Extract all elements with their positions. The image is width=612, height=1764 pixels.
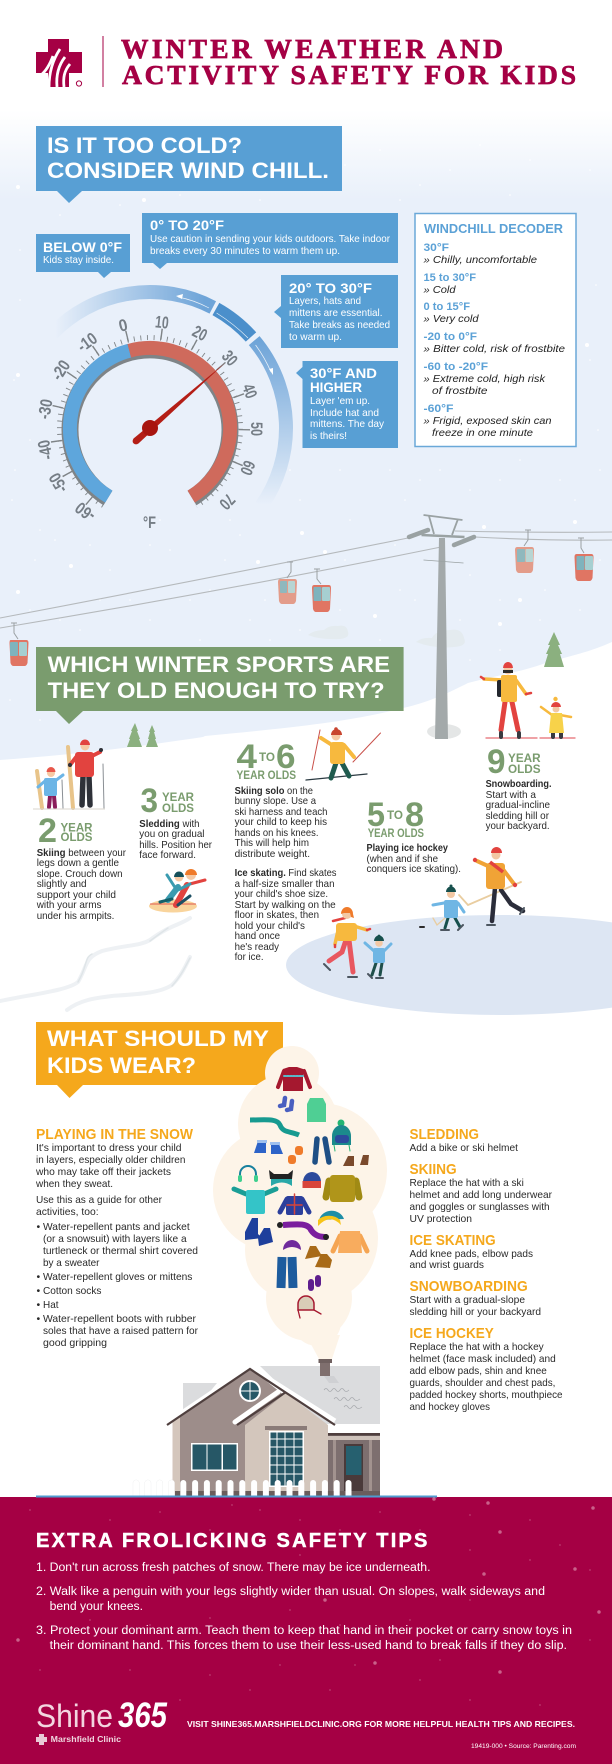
age block: 9 year olds: sledding hill or (486, 810, 549, 822)
gondola 4 (574, 538, 594, 581)
icon: blue socks (280, 1098, 292, 1110)
age block: 4 to 6 year olds: This will help him (235, 837, 309, 849)
age block: 5 to 8 year olds: 8 (405, 796, 424, 834)
text block: activity gear additions: helmet and add long underwear (410, 1189, 552, 1201)
icon: brown boots (343, 1155, 369, 1166)
icon: blue pants (281, 1257, 293, 1288)
text block: numbered tips (36, 1562, 572, 1652)
scale numbers: -50 (45, 469, 72, 496)
callout: 0 to 20F: 0° TO 20°F (150, 217, 224, 233)
age block: 2 year olds: legs down a gentle (37, 857, 119, 869)
age block: 4 to 6 year olds: hand once (235, 930, 280, 942)
roof edges (167, 1367, 335, 1425)
age block: 9 year olds: Start with a (486, 789, 536, 801)
age block: 4 to 6 year olds: a half-size smaller than (235, 878, 335, 890)
title (121, 33, 576, 90)
callout: 20 to 30F: to warm up. (289, 331, 342, 343)
text block: playing in the snow: turtleneck or thermal shirt covered (43, 1245, 198, 1257)
age block: 4 to 6 year olds (235, 738, 336, 963)
text block: activity gear additions: ICE HOCKEY (410, 1325, 494, 1342)
icon: teal earmuffs (238, 1166, 258, 1182)
text block: numbered tips: bend your knees. (50, 1601, 143, 1613)
heading: what should my kids wear (36, 1022, 283, 1098)
text block: playing in the snow: Cotton socks (43, 1285, 102, 1297)
age block: 4 to 6 year olds: Skiing solo on the (235, 785, 313, 797)
scale numbers: -40 (34, 438, 57, 462)
heading: extra safety tips: EXTRA FROLICKING SAFETY TIPS (36, 1530, 427, 1552)
fence (136, 1483, 380, 1497)
icon: red and navy hat (302, 1172, 321, 1188)
clouds behind the lift (308, 626, 465, 647)
text block: playing in the snow: • (36, 1299, 40, 1311)
panel: windchill decoder: » Chilly, uncomfortable (424, 254, 537, 266)
callout: below 0F: BELOW 0°F (43, 239, 122, 255)
callout: 30F and higher: 30°F AND (310, 365, 377, 381)
chart: thermometer gauge (34, 292, 286, 532)
gauge ring (70, 348, 230, 498)
age block: 2 year olds: support your child (37, 889, 116, 901)
ski lift cables (0, 531, 612, 628)
text block: playing in the snow: • (36, 1313, 40, 1325)
panel: windchill decoder: » Cold (424, 284, 457, 296)
clothing icons (234, 1067, 369, 1318)
panel: windchill decoder: 15 to 30°F (424, 272, 476, 284)
panel: windchill decoder: -20 to 0°F (424, 331, 477, 343)
callout: 30F and higher: HIGHER (310, 379, 362, 395)
age block: 4 to 6 year olds: hands on his knees. (235, 827, 318, 839)
text block: numbered tips: their dominant hand. This forces them to use their less-used hand to break falls if they do slip. (50, 1640, 567, 1652)
logo: Shine365: 365 (118, 1696, 167, 1735)
age block: 3 year olds: you on gradual (139, 828, 204, 840)
heading: which winter sports: THEY OLD ENOUGH TO TRY? (48, 678, 385, 703)
text block: playing in the snow: Water-repellent pants and jacket (43, 1221, 190, 1233)
age block: 4 to 6 year olds: he's ready (235, 941, 280, 953)
text: source: 19419-000 • Source: Parenting.com (471, 1743, 576, 1750)
age block: 5 to 8 year olds: conquers ice skating). (366, 863, 461, 875)
tall window (265, 1426, 307, 1487)
icon: red sweater (278, 1067, 310, 1091)
chimney (318, 1359, 339, 1383)
age block: 9 year olds: OLDS (508, 764, 541, 776)
text block: activity gear additions: Add knee pads, elbow pads (410, 1248, 533, 1260)
panel: windchill decoder: freeze in one minute (432, 427, 533, 439)
snow hill (0, 642, 612, 1497)
text block: playing in the snow: Water-repellent gloves or mittens (43, 1271, 192, 1283)
age block: 3 year olds: YEAR (162, 792, 195, 804)
icon: navy pants (315, 1139, 329, 1162)
figure: parent and toddler on skis (33, 740, 105, 809)
ski lift tower (409, 515, 474, 739)
text block: playing in the snow: Hat (43, 1299, 59, 1311)
text block: playing in the snow: • (36, 1285, 40, 1297)
age block: 2 year olds: under his armpits. (37, 910, 114, 922)
callout: 20 to 30F: Layers, hats and (289, 295, 361, 307)
callout: 30F and higher: Layer 'em up. (310, 395, 370, 407)
scale numbers: -10 (74, 329, 101, 356)
panel: windchill decoder: -60 to -20°F (424, 361, 488, 373)
icon: teal jacket (234, 1189, 276, 1214)
text block: playing in the snow: soles that have a raised pattern for (43, 1325, 198, 1337)
title: WINTER WEATHER AND (121, 33, 503, 64)
panel: windchill decoder: 30°F (424, 242, 449, 254)
icon: Marshfield Clinic wheat cross logo (36, 39, 82, 87)
porch (328, 1424, 380, 1496)
panel: windchill decoder: » Bitter cold, risk of frostbite (424, 343, 565, 355)
age block: 5 to 8 year olds: 5 (367, 796, 385, 834)
icon: red trapper hat (298, 1296, 321, 1318)
callout: 0 to 20F: breaks every 30 minutes to warm them up. (150, 245, 340, 257)
text block: playing in the snow: It's important to dress your child (36, 1142, 182, 1154)
panel: windchill decoder: » Very cold (424, 313, 480, 325)
age block: 4 to 6 year olds: floor in skates, then (235, 909, 319, 921)
text block: activity gear additions (410, 1126, 563, 1413)
gondola 1 (278, 562, 297, 604)
panel: windchill decoder: » Frigid, exposed skin can (424, 415, 552, 427)
callout: below 0F: Kids stay inside. (43, 254, 114, 266)
text block: activity gear additions: SKIING (410, 1161, 457, 1178)
age block: 3 year olds (139, 782, 212, 861)
figure: two kids on a snow tube (149, 869, 205, 912)
text block: playing in the snow: by a sweater (43, 1257, 100, 1269)
panel: windchill decoder (415, 214, 576, 446)
age block: 5 to 8 year olds: TO (387, 810, 403, 822)
text block: playing in the snow: when they sweat. (35, 1178, 113, 1190)
age block: 5 to 8 year olds: (when and if she (366, 853, 438, 865)
age block: 5 to 8 year olds (366, 796, 461, 875)
gondola 3 (515, 530, 534, 573)
heading: is it too cold: IS IT TOO COLD? (47, 133, 242, 158)
logo: Shine365 (36, 1696, 167, 1735)
figure: ice skating parent and child (324, 907, 391, 978)
trees (127, 632, 564, 747)
age block: 9 year olds (486, 743, 552, 832)
age block: 2 year olds: with your arms (36, 899, 102, 911)
tick marks (56, 333, 245, 506)
age block: 4 to 6 year olds: bunny slope. Use a (235, 795, 316, 807)
age block: 9 year olds: YEAR (508, 753, 541, 765)
gondola 2 (312, 569, 331, 612)
text block: activity gear additions: UV protection (410, 1213, 472, 1225)
text block: playing in the snow: activities, too: (36, 1206, 99, 1218)
text block: activity gear additions: guards, shoulder and chest pads, (410, 1377, 555, 1389)
scale numbers: 60 (236, 458, 259, 478)
gondola 5 (10, 623, 28, 666)
round window (239, 1380, 261, 1402)
icon: black and teal hat (269, 1170, 293, 1186)
age block: 4 to 6 year olds: hold your child's (235, 920, 305, 932)
scale numbers: 70 (215, 490, 239, 513)
icon: teal scarf (250, 1120, 299, 1135)
age block: 4 to 6 year olds: Ice skating. Find skates (235, 867, 336, 879)
text block: playing in the snow (35, 1126, 198, 1349)
callout: 30F and higher: is theirs! (310, 430, 347, 442)
callout: 30F and higher: Include hat and (310, 407, 379, 419)
walls (172, 1415, 180, 1497)
age block: 2 year olds: OLDS (60, 832, 93, 844)
age block: 9 year olds: 9 (487, 743, 506, 781)
icon: green vest (307, 1098, 326, 1122)
age block: 9 year olds: your backyard. (486, 820, 550, 832)
scale numbers: 0 (117, 315, 130, 336)
icon: purple mittens (311, 1278, 318, 1288)
icon: purple hat (283, 1240, 301, 1250)
text block: playing in the snow: Water-repellent boots with rubber (43, 1313, 196, 1325)
text block: playing in the snow: PLAYING IN THE SNOW (36, 1126, 194, 1143)
scale numbers: 20 (189, 322, 210, 345)
figure: young skier (306, 727, 380, 780)
text block: activity gear additions: add elbow pads, shin and knee (410, 1365, 547, 1377)
scale numbers (34, 312, 266, 532)
text block: numbered tips: 3. Protect your dominant arm. Teach them to keep that hand in their pocket or carry snow toys in (36, 1625, 572, 1637)
figure: snowboarding parent and child (481, 662, 575, 738)
text block: activity gear additions: and goggles or sunglasses with (410, 1201, 550, 1213)
scale numbers: 50 (247, 422, 266, 436)
icon: blue snow boots (254, 1140, 283, 1154)
panel: windchill decoder: of frostbite (432, 385, 488, 397)
text block: activity gear additions: Replace the hat with a ski (410, 1177, 524, 1189)
logo: Shine365: Shine (36, 1698, 113, 1734)
ski trails in the snow (0, 918, 190, 1010)
icon: navy boots (245, 1218, 273, 1246)
age block: 3 year olds: OLDS (162, 803, 194, 815)
text block: playing in the snow: • (36, 1221, 40, 1233)
panel: windchill decoder: WINDCHILL DECODER (424, 221, 564, 236)
age block: 4 to 6 year olds: 4 (236, 738, 257, 776)
age block: 9 year olds: Snowboarding. (486, 778, 552, 790)
text block: playing in the snow: in layers, especially older children (36, 1154, 186, 1166)
age block: 4 to 6 year olds: your child's shoe size. (235, 888, 328, 900)
text block: playing in the snow: • (36, 1271, 40, 1283)
icon: yellow and teal hat (318, 1211, 344, 1226)
icon: orange mittens (288, 1146, 303, 1164)
roof (183, 1366, 380, 1425)
heading: what should my kids wear: WHAT SHOULD MY (47, 1026, 269, 1051)
icon: teal knit hat (332, 1120, 351, 1151)
text block: activity gear additions: SLEDDING (410, 1126, 479, 1143)
text block: activity gear additions: Add a bike or ski helmet (410, 1142, 518, 1154)
text: website call to action: VISIT SHINE365.MARSHFIELDCLINIC.ORG FOR MORE HELPFUL HEALTH TIPS AND RECIPES. (187, 1719, 575, 1729)
scale numbers: 10 (154, 312, 170, 333)
text block: activity gear additions: padded hockey shorts, mouthpiece (410, 1389, 563, 1401)
text block: activity gear additions: Start with a gradual-slope (410, 1294, 525, 1306)
logo: Marshfield Clinic: Marshfield Clinic (51, 1734, 121, 1744)
age block: 4 to 6 year olds: YEAR OLDS (236, 770, 296, 782)
callout: 30F and higher (296, 361, 398, 448)
scale numbers: °F (143, 513, 156, 532)
age block: 2 year olds (36, 812, 126, 922)
text block: activity gear additions: SNOWBOARDING (410, 1278, 528, 1295)
age block: 3 year olds: hills. Position her (139, 839, 212, 851)
age block: 2 year olds: Skiing between your (37, 847, 126, 859)
panel: windchill decoder: 0 to 15°F (424, 301, 470, 313)
age block: 4 to 6 year olds: Start by walking on the (235, 899, 336, 911)
chimney smoke cloud (213, 1046, 387, 1359)
callout: below 0F (36, 234, 130, 278)
text block: playing in the snow: (or a snowsuit) with layers like a (43, 1233, 187, 1245)
house illustration (136, 1359, 380, 1497)
icon: navy and red jacket (280, 1194, 309, 1215)
text block: activity gear additions: sledding hill or your backyard (410, 1306, 541, 1318)
icon: purple scarf (277, 1222, 329, 1240)
gauge needle (133, 363, 225, 444)
icon: brown and yellow boots (305, 1246, 332, 1268)
heading: which winter sports (36, 647, 404, 724)
age block: 5 to 8 year olds: Playing ice hockey (366, 842, 448, 854)
text block: activity gear additions: and wrist guards (410, 1259, 484, 1271)
callout: 20 to 30F (274, 275, 398, 348)
text block: activity gear additions: Replace the hat with a hockey (410, 1341, 544, 1353)
title: ACTIVITY SAFETY FOR KIDS (122, 59, 576, 90)
callout: 0 to 20F (142, 213, 398, 269)
callout: 20 to 30F: Take breaks as needed (289, 319, 390, 331)
heading: which winter sports: WHICH WINTER SPORTS ARE (48, 652, 390, 677)
age block: 4 to 6 year olds: ski harness and teach (235, 806, 328, 818)
left window (191, 1443, 238, 1471)
scale numbers: 40 (238, 381, 261, 401)
heading: what should my kids wear: KIDS WEAR? (47, 1053, 196, 1078)
callout: 20 to 30F: mittens are essential. (289, 307, 382, 319)
scale numbers: 30 (218, 347, 241, 370)
icon: olive jacket (326, 1175, 359, 1202)
age block: 4 to 6 year olds: your child to keep his (235, 816, 327, 828)
age block: 9 year olds: gradual-incline (486, 799, 550, 811)
text block: activity gear additions: helmet (face mask included) and (410, 1353, 556, 1365)
age block: 2 year olds: 2 (38, 812, 57, 850)
age block: 3 year olds: Sledding with (139, 818, 200, 830)
text block: playing in the snow: who may take off their jackets (35, 1166, 171, 1178)
callout: 0 to 20F: Use caution in sending your kids outdoors. Take indoor (150, 233, 390, 245)
age block: 4 to 6 year olds: for ice. (235, 951, 264, 963)
panel: windchill decoder: -60°F (424, 403, 454, 415)
callout: 20 to 30F: 20° TO 30°F (289, 280, 372, 296)
footer panel (0, 1496, 612, 1764)
text block: numbered tips: 2. Walk like a penguin with your legs slightly wider than usual. On slopes, walk sideways and (36, 1586, 545, 1598)
scale numbers: -30 (34, 398, 57, 421)
text block: numbered tips: 1. Don't run across fresh patches of snow. There may be ice underneath. (36, 1562, 430, 1574)
age block: 2 year olds: slope. Crouch down (37, 868, 123, 880)
heading: is it too cold (36, 126, 342, 203)
age block: 3 year olds: 3 (140, 782, 158, 820)
header: logo and title (36, 33, 576, 90)
age block: 4 to 6 year olds: 6 (276, 738, 296, 776)
scale numbers: -20 (48, 357, 74, 384)
age block: 4 to 6 year olds: distribute weight. (235, 848, 310, 860)
scale numbers: -60 (72, 498, 99, 525)
age block: 4 to 6 year olds: TO (259, 752, 275, 764)
age block: 5 to 8 year olds: YEAR OLDS (368, 828, 424, 840)
figure: ice hockey parent and child (420, 847, 524, 930)
ice pond (286, 915, 612, 1015)
panel: windchill decoder: » Extreme cold, high risk (424, 373, 546, 385)
heading: is it too cold: CONSIDER WIND CHILL. (47, 158, 329, 183)
text block: activity gear additions: and hockey gloves (410, 1401, 490, 1413)
age block: 2 year olds: YEAR (60, 822, 93, 834)
outer range arcs (52, 292, 286, 506)
text block: playing in the snow: good gripping (43, 1337, 107, 1349)
icon: orange sweater (333, 1231, 367, 1253)
text block: playing in the snow: Use this as a guide for other (36, 1194, 162, 1206)
text block: activity gear additions: ICE SKATING (410, 1232, 496, 1249)
age block: 2 year olds: slightly and (37, 878, 87, 890)
age block: 3 year olds: face forward. (139, 849, 196, 861)
callout: 30F and higher: mittens. The day (310, 418, 385, 430)
